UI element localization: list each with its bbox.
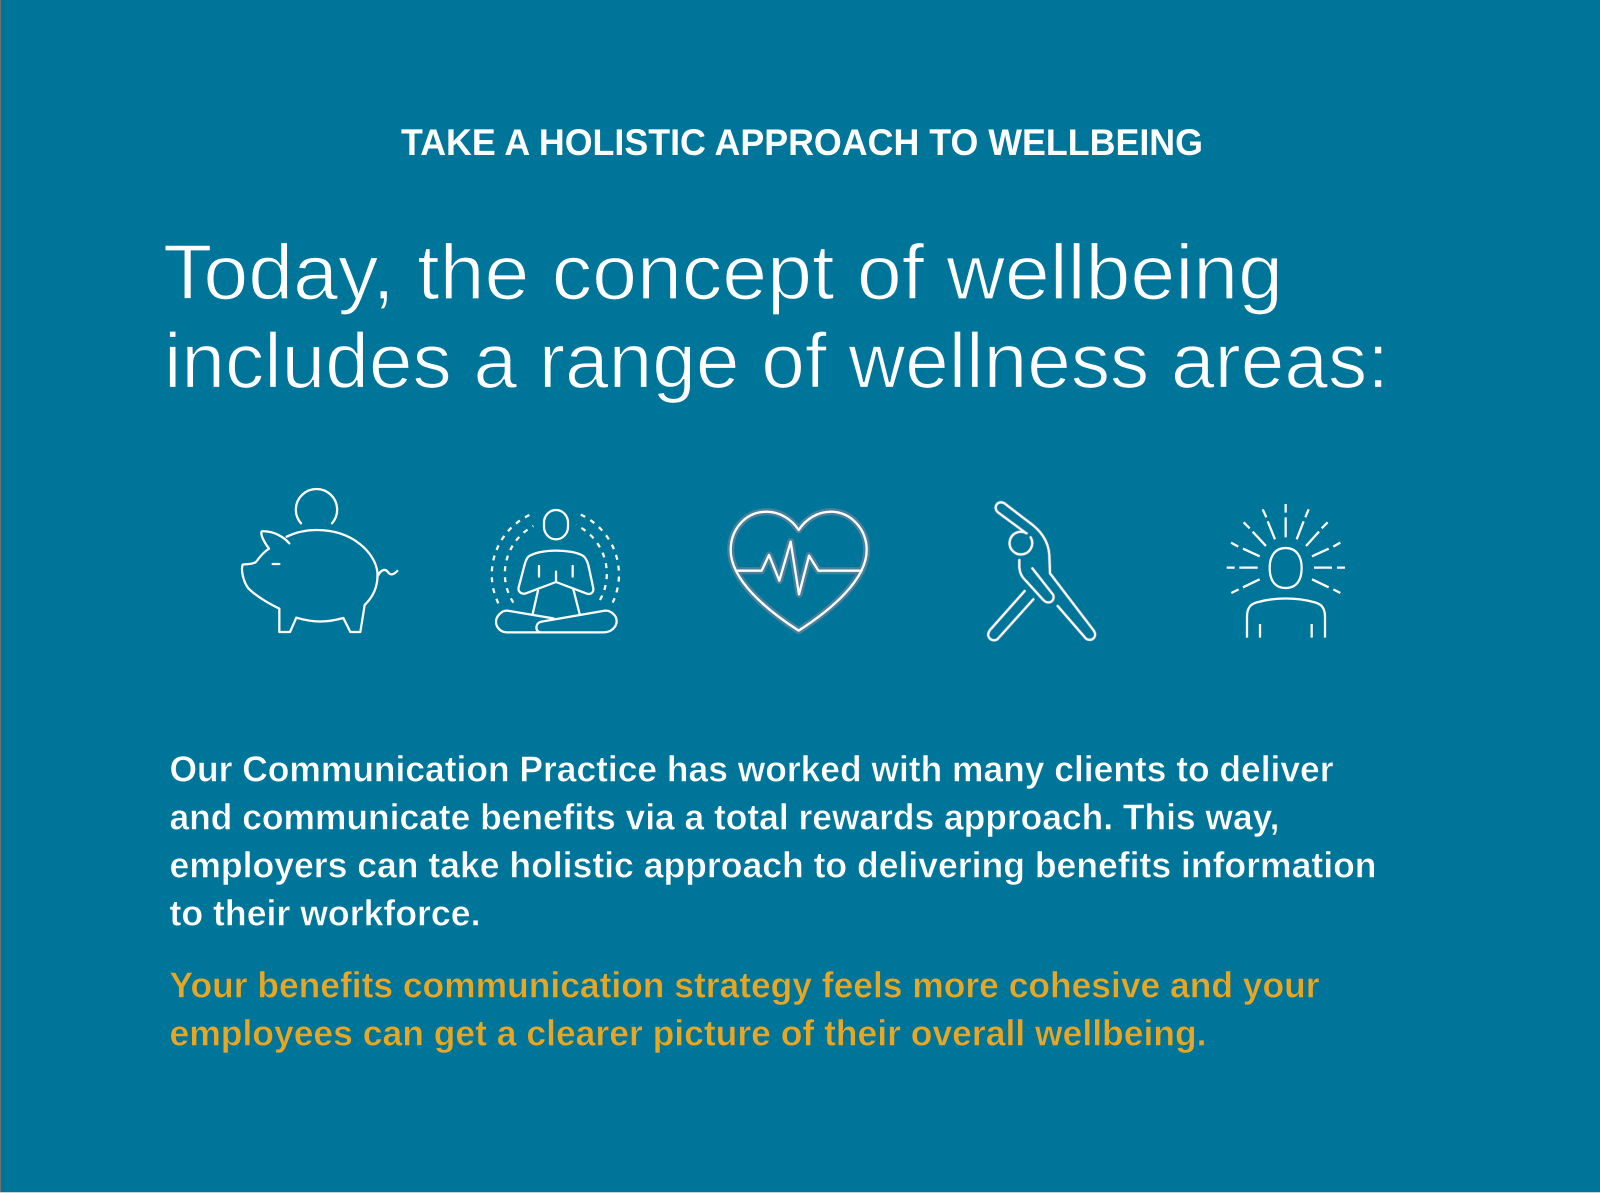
heading: Today, the concept of wellbeing <box>163 228 1283 316</box>
heading: includes a range of wellness areas: <box>164 316 1389 404</box>
heading <box>163 228 1389 404</box>
body paragraph <box>170 748 1376 934</box>
icon: stretching person <box>988 502 1095 640</box>
icon: piggy bank <box>242 489 397 632</box>
highlighted closing paragraph <box>170 964 1320 1054</box>
highlighted closing paragraph: employees can get a clearer picture of their overall wellbeing. <box>170 1012 1206 1054</box>
body paragraph: to their workforce. <box>170 892 480 934</box>
body paragraph: employers can take holistic approach to delivering benefits information <box>170 844 1376 886</box>
icon: meditating person <box>492 510 619 632</box>
highlighted closing paragraph: Your benefits communication strategy feels more cohesive and your <box>170 964 1320 1006</box>
icon: heart with pulse <box>731 512 867 631</box>
body paragraph: and communicate benefits via a total rewards approach. This way, <box>170 796 1280 838</box>
title: TAKE A HOLISTIC APPROACH TO WELLBEING <box>401 122 1203 163</box>
body paragraph: Our Communication Practice has worked with many clients to deliver <box>170 748 1334 790</box>
icon: person with radiating lines <box>1227 504 1345 638</box>
